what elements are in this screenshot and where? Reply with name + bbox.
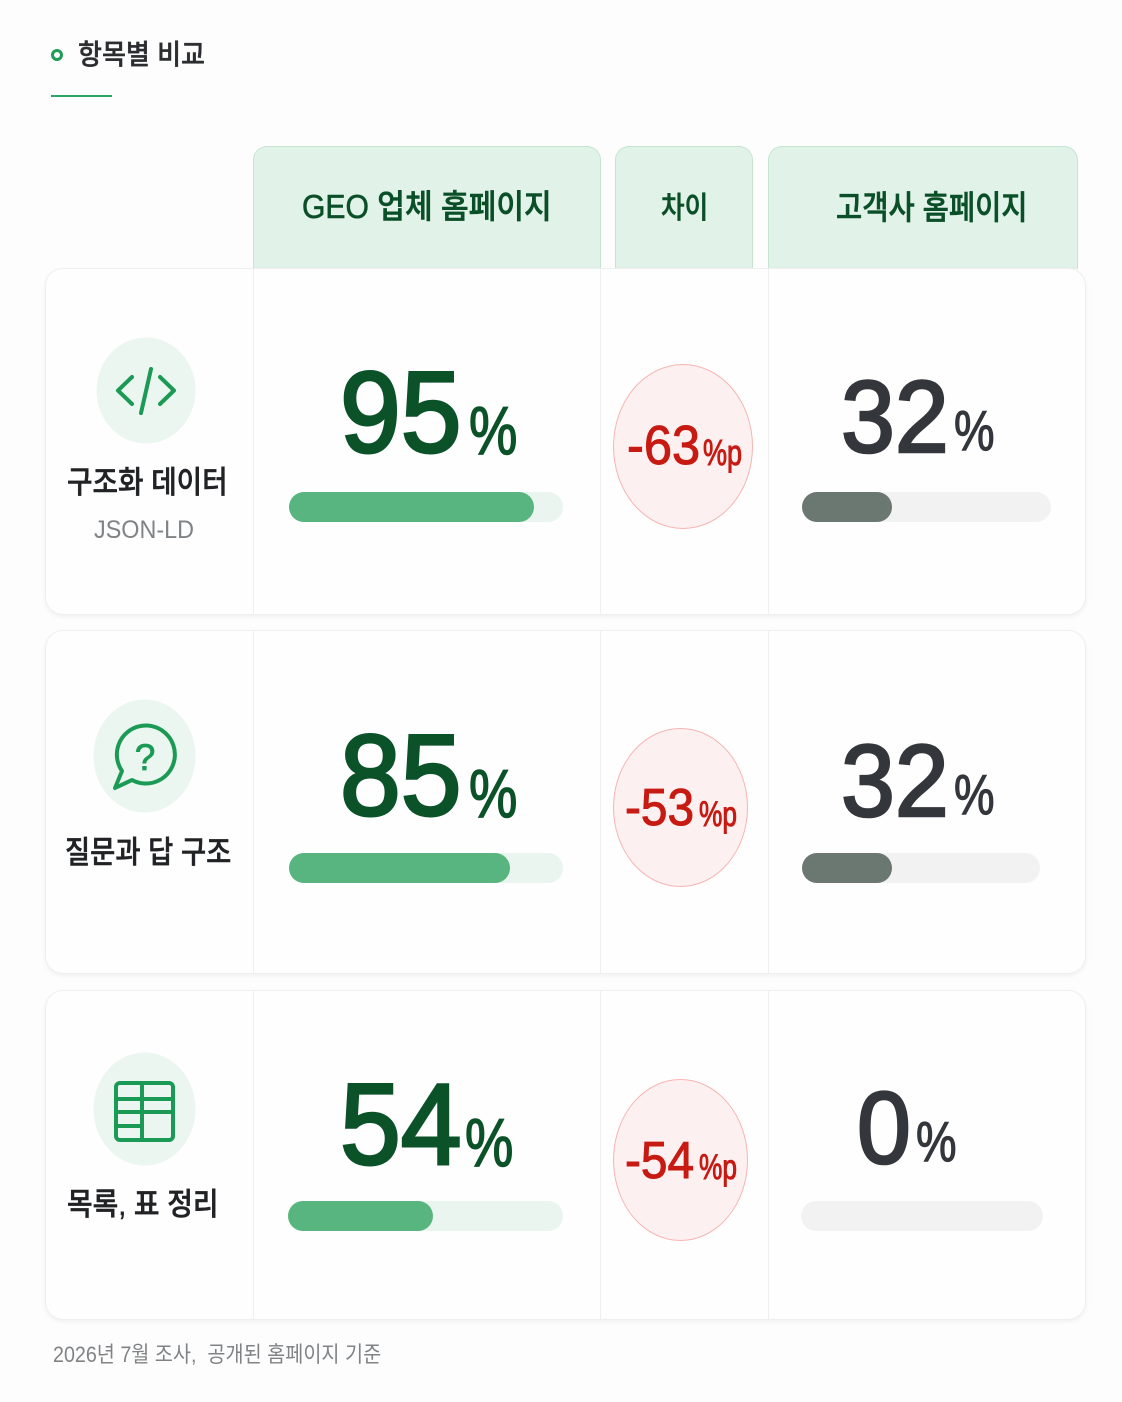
value: client 32%: 32: [841, 724, 949, 838]
difference badge: -63%p: %p: [703, 432, 742, 473]
footnote: 2026년 7월 조사, 공개된 홈페이지 기준: [53, 1342, 381, 1367]
difference badge: -53%p: %p: [699, 795, 737, 834]
column header: client: [768, 146, 1078, 269]
progress bar: GEO 54%: [288, 1201, 563, 1231]
heading underline: [51, 95, 112, 97]
value: GEO 95%: %: [469, 393, 517, 469]
value: client 0%: [857, 1071, 957, 1185]
difference badge: -53%p: -53: [625, 779, 694, 837]
value: GEO 54%: 54: [340, 1061, 462, 1189]
value: client 0%: 0: [857, 1071, 911, 1185]
value: client 32%: %: [954, 763, 995, 827]
row card 3: lists and tables: [45, 990, 1086, 1320]
progress bar: client 32%: [802, 492, 1051, 522]
difference badge: -54%p: %p: [699, 1148, 737, 1187]
value: GEO 54%: %: [465, 1105, 513, 1181]
difference badge: -54%p: -54: [625, 1132, 694, 1190]
row label: lists and tables: 목록, 표 정리: [67, 1187, 219, 1222]
row label: structured data: 구조화 데이터: [67, 465, 228, 500]
difference badge: -63%p: [613, 364, 753, 529]
icon: table: [94, 1052, 196, 1166]
value: GEO 95%: 95: [340, 349, 462, 477]
value: GEO 95%: [340, 349, 517, 477]
row label: Q&A structure: 질문과 답 구조: [65, 835, 231, 870]
heading marker: [51, 49, 63, 61]
progress bar: GEO 85%: [289, 853, 563, 883]
icon: question bubble: [94, 700, 196, 812]
column header: difference: 차이: [661, 192, 708, 225]
icon: code: [96, 338, 196, 444]
value: client 32%: 32: [841, 360, 949, 474]
value: client 0%: %: [916, 1110, 957, 1174]
value: GEO 85%: 85: [340, 712, 462, 840]
progress bar: GEO 95%: [289, 492, 563, 522]
row card 2: Q&A structure: [45, 630, 1086, 974]
difference badge: -63%p: -63: [627, 414, 700, 476]
column header: client: 고객사 홈페이지: [836, 189, 1028, 226]
row card 1: structured data: [45, 268, 1086, 615]
value: GEO 85%: %: [469, 756, 517, 832]
progress bar: client 32%: [802, 853, 1040, 883]
column header: difference: [615, 146, 753, 269]
section heading: [51, 39, 205, 97]
value: client 32%: %: [954, 399, 995, 463]
progress bar: client 0%: [801, 1201, 1043, 1231]
difference badge: -54%p: [613, 1079, 748, 1241]
heading text: 항목별 비교: [78, 39, 205, 70]
icon: question bubble: ?: [135, 737, 155, 778]
column header: GEO: GEO 업체 홈페이지: [302, 188, 552, 225]
value: GEO 85%: [340, 712, 517, 840]
row sublabel: JSON-LD: JSON-LD: [94, 516, 194, 544]
column header: GEO: [253, 146, 601, 269]
difference badge: -53%p: [613, 728, 748, 887]
